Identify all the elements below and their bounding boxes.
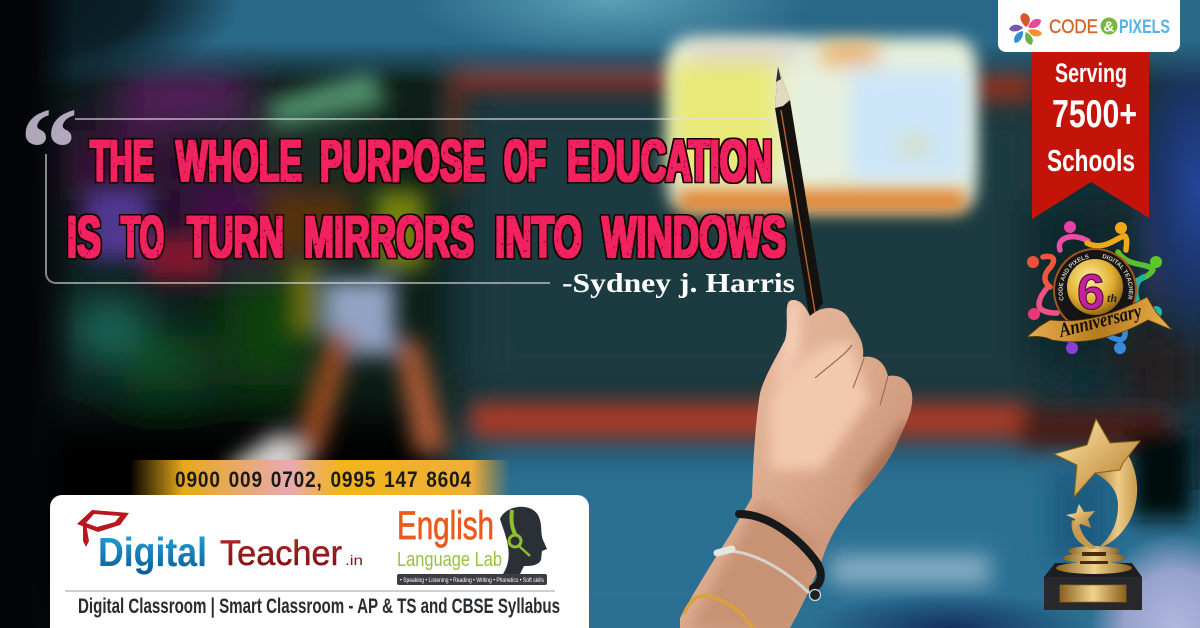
icon: star trophy xyxy=(1044,419,1142,610)
trophy swooshes xyxy=(1095,453,1137,548)
badge: 6th anniversary: DIGITAL TEACHER xyxy=(1102,254,1134,300)
logo: Digital Teacher: Digital xyxy=(98,529,207,575)
badge: 6th anniversary: 6 xyxy=(1077,264,1105,320)
large star xyxy=(1054,419,1140,497)
bracelets xyxy=(739,514,821,588)
logo: Code & Pixels: & xyxy=(1104,18,1114,36)
ribbon: serving schools: 7500+ xyxy=(1052,93,1137,136)
hand xyxy=(680,296,920,628)
heading: quote text: EDUCATION xyxy=(567,129,772,194)
logo: Code & Pixels: PIXELS xyxy=(1119,17,1170,38)
heading: quote text: PURPOSE xyxy=(320,129,485,194)
tagline: Digital Classroom | Smart Classroom - AP & TS and CBSE Syllabus xyxy=(78,595,560,618)
logo: English Language Lab xyxy=(397,504,547,585)
badge: 6th anniversary: CODE AND PIXELS xyxy=(1058,254,1089,300)
logo: English Language Lab: • Speaking • Listening • Reading • Writing • Phonetics • Soft skills xyxy=(400,578,544,584)
heading: quote text: THE xyxy=(90,129,154,194)
heading: quote text: WHOLE xyxy=(176,129,302,194)
trophy tiers xyxy=(1056,562,1132,574)
small star xyxy=(1066,504,1095,529)
ribbon: serving schools: Schools xyxy=(1047,143,1135,178)
logo: Digital Teacher xyxy=(77,510,363,575)
icon: raised hand holding a pencil xyxy=(680,67,920,628)
logo: Code & Pixels: CODE xyxy=(1049,17,1098,38)
logo: Digital Teacher: .in xyxy=(345,552,363,568)
icon: opening quotation mark: “ xyxy=(20,85,78,213)
logo: Code & Pixels xyxy=(998,0,1180,52)
attribution: -Sydney j. Harris xyxy=(562,268,795,298)
heading: quote text: OF xyxy=(504,129,546,194)
phone number strip xyxy=(130,460,510,495)
ribbon: serving schools: Serving xyxy=(1055,58,1127,88)
heading: quote text: INTO xyxy=(495,205,582,270)
logo: English Language Lab: English xyxy=(397,504,494,548)
heading: quote text: TO xyxy=(121,205,164,270)
badge: 6th anniversary: th xyxy=(1107,291,1117,305)
logo: English Language Lab: Language Lab xyxy=(397,549,502,571)
badge: 6th anniversary xyxy=(1026,221,1172,354)
pencil xyxy=(775,67,823,320)
heading: quote text: TURN xyxy=(187,205,284,270)
heading: quote text: IS xyxy=(67,205,101,270)
phone number strip: 0900 009 0702, 0995 147 8604 xyxy=(175,467,472,492)
ribbon: serving schools xyxy=(1032,50,1149,219)
heading: quote text xyxy=(67,129,786,270)
quote frame lines xyxy=(46,119,778,283)
heading: quote text: MIRRORS xyxy=(304,205,474,270)
icon: pinwheel xyxy=(1009,13,1042,45)
badge: 6th anniversary: Anniversary xyxy=(1055,300,1144,342)
heading: quote text: WINDOWS xyxy=(602,205,786,270)
logo: Digital Teacher: Teacher xyxy=(220,534,342,573)
panel: contact and logos xyxy=(50,495,589,628)
trophy stand xyxy=(1044,563,1142,610)
